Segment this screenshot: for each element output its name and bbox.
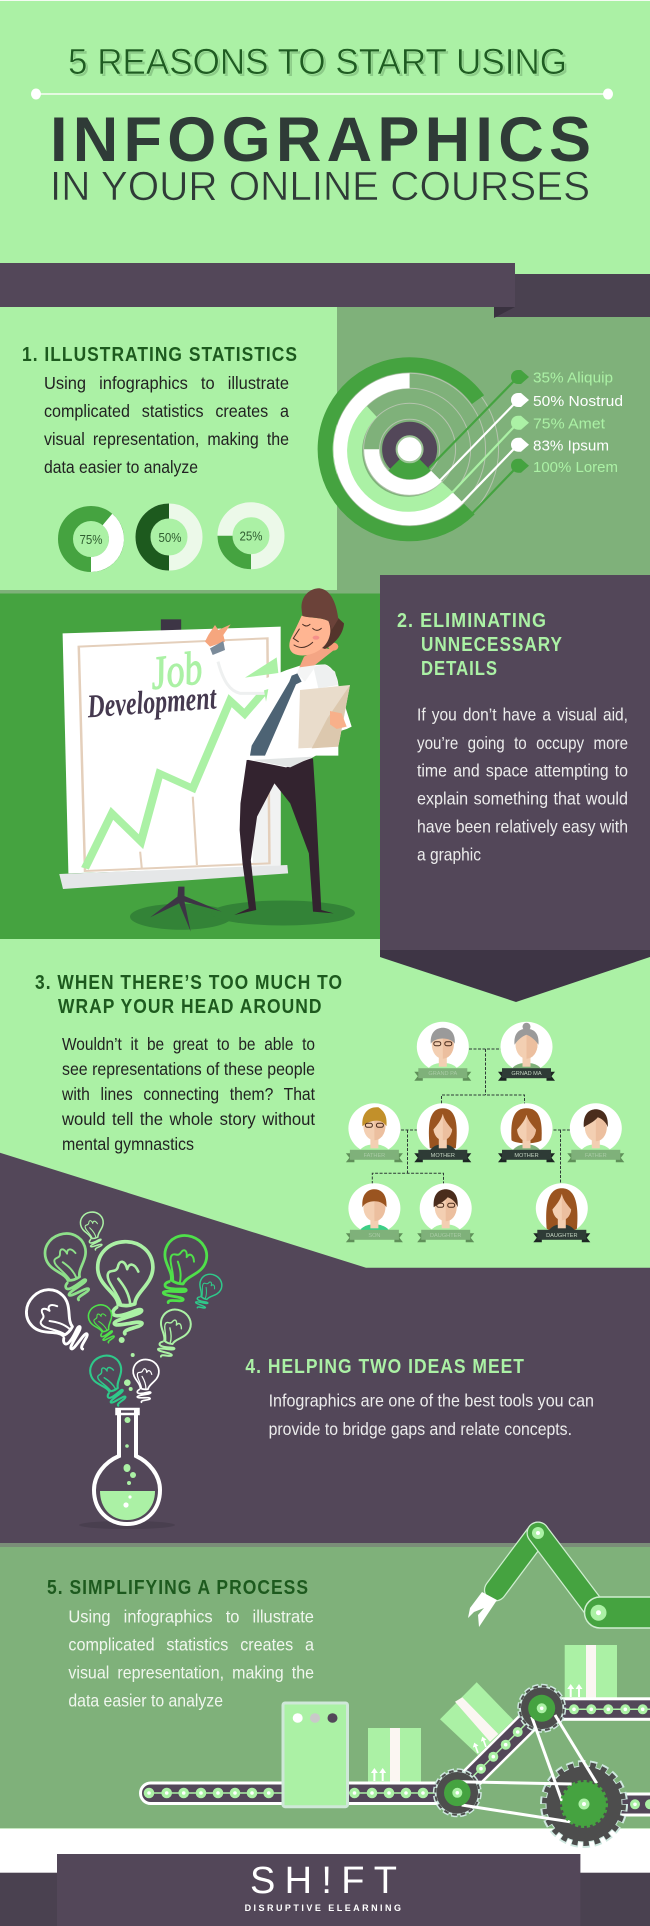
avatar: mother 2: MOTHER (514, 1153, 539, 1159)
title divider (31, 88, 613, 100)
legend pins (511, 370, 529, 473)
panel: section 2 illustration background (0, 590, 380, 939)
avatar: daughter 1 (417, 1183, 474, 1244)
hand on document (330, 711, 347, 729)
face (289, 616, 330, 655)
logo tagline: DISRUPTIVE ELEARNING (245, 1903, 401, 1913)
chart bars (140, 797, 197, 868)
panel: section 5 background (0, 1543, 650, 1873)
drive belts (460, 1715, 597, 1822)
title line: 5 reasons: 5 REASONS TO START USING (68, 41, 567, 82)
radial chart legend (429, 370, 623, 513)
panel: section 3 text (35, 971, 343, 1154)
legend connector lines (429, 377, 518, 513)
panel: section 4 dark background (0, 1153, 650, 1543)
donut chart 75%: 75% (80, 532, 103, 547)
box on upper belt (565, 1645, 617, 1698)
avatar: mother 1 (414, 1103, 471, 1164)
chart title: Development: Development (85, 680, 218, 725)
avatar: father 2: FATHER (585, 1153, 607, 1159)
body text 3: see representations of these people (62, 1059, 315, 1079)
body text 2: a graphic (417, 845, 481, 865)
tree connectors (372, 1049, 570, 1184)
legend labels (533, 371, 623, 476)
legend labels: 50% Nostrud (533, 394, 623, 410)
body text 5: complicated statistics creates a (68, 1635, 314, 1655)
necktie (250, 673, 302, 756)
title block (31, 41, 613, 209)
chart title: Job: Job (147, 642, 205, 700)
avatar: son (346, 1183, 403, 1244)
body text 4 (269, 1391, 594, 1439)
easel stand (150, 619, 222, 932)
facial features (293, 624, 321, 647)
gear bodies (434, 1685, 624, 1844)
heading 2: 2. ELIMINATING (397, 609, 547, 632)
avatar: father 1 (346, 1103, 403, 1164)
collar (297, 665, 317, 682)
upper belt (545, 1699, 650, 1719)
sorting machine (283, 1703, 348, 1807)
avatar: daughter 1: DAUGHTER (430, 1233, 461, 1239)
heading 5: 5. SIMPLIFYING A PROCESS (47, 1576, 309, 1599)
rising bubbles (119, 1337, 135, 1391)
body text 5 (68, 1607, 314, 1711)
panel: section 2 dark panel (380, 575, 650, 1002)
body text 2: If you don’t have a visual aid, (417, 705, 628, 725)
body text 3: mental gymnastics (62, 1134, 194, 1154)
gear body: upper small (519, 1685, 565, 1731)
heading 3: 3. WHEN THERE’S TOO MUCH TO (35, 971, 343, 994)
radial chart (321, 360, 499, 538)
heading 2: DETAILS (421, 657, 498, 680)
floor shadows (130, 900, 355, 930)
heading 3: WRAP YOUR HEAD AROUND (58, 995, 322, 1018)
logo: SH!FT: SH!FT (250, 1860, 397, 1902)
illustration: robot arm (468, 1527, 650, 1628)
document (298, 685, 350, 748)
avatar: son: SON (368, 1233, 380, 1239)
body text 4: provide to bridge gaps and relate concepts. (269, 1419, 572, 1439)
body text 2 (417, 705, 628, 865)
avatar: father 2 (567, 1103, 624, 1164)
avatar: daughter 2 (533, 1183, 590, 1244)
body text 5: visual representation, making the (68, 1663, 314, 1683)
tilted box (440, 1682, 513, 1755)
panel: section 1 text (22, 343, 298, 477)
body text 1: complicated statistics creates a (44, 401, 289, 421)
inclined belt (456, 1709, 541, 1793)
donut chart 75% (66, 514, 116, 564)
heading 4: 4. HELPING TWO IDEAS MEET (245, 1355, 525, 1378)
avatar: daughter 2: DAUGHTER (546, 1233, 577, 1239)
avatar: grand ma: GRNAD MA (511, 1071, 542, 1077)
trousers (234, 758, 334, 915)
body text 3 (61, 1034, 315, 1154)
body text 4: Infographics are one of the best tools you can (269, 1391, 594, 1411)
panel: section 4 text (245, 1355, 594, 1439)
body text 1: data easier to analyze (44, 457, 198, 477)
avatar: mother 1: MOTHER (431, 1153, 455, 1159)
panel: section 5 text (47, 1576, 314, 1711)
illustration: flask (79, 1409, 175, 1529)
donut chart 25%: 25% (240, 528, 263, 544)
donut chart 50% (143, 511, 195, 563)
body text 3: with lines connecting them? That (61, 1084, 315, 1104)
heading 2 (397, 609, 563, 680)
family tree (346, 1022, 624, 1244)
body text 5: data easier to analyze (68, 1691, 223, 1711)
shirt and raised arm (214, 650, 352, 756)
illustration: light bulbs (18, 1210, 225, 1411)
body text 3: Wouldn’t it be great to be able to (62, 1034, 315, 1054)
ear (328, 643, 338, 651)
easel board (63, 627, 281, 873)
illustration: presenter at easel (59, 588, 355, 932)
legend labels: 100% Lorem (533, 460, 618, 476)
gear body: lower small (434, 1770, 480, 1816)
gear hubs (444, 1695, 606, 1826)
arm highlight (245, 657, 278, 678)
avatar: grand ma (498, 1022, 555, 1083)
hair (302, 588, 338, 630)
footer (0, 1854, 650, 1926)
illustration: conveyor system (140, 1645, 650, 1844)
heading 1: 1. ILLUSTRATING STATISTICS (22, 343, 298, 366)
body text 2: time and space attempting to (417, 761, 628, 781)
body text 3: would tell the whole story without (61, 1109, 315, 1129)
heading 3 (35, 971, 343, 1018)
avatar: mother 2 (498, 1103, 555, 1164)
right belt (610, 1794, 650, 1815)
box on lower belt (368, 1728, 421, 1782)
body text 2: have been relatively easy with (417, 817, 628, 837)
legend labels: 83% Ipsum (533, 439, 609, 455)
gear body: large (544, 1764, 624, 1844)
body text 2: explain something that would (417, 789, 628, 809)
legend labels: 35% Aliquip (533, 371, 613, 387)
panel: statistics chart background (337, 300, 650, 594)
title line: in your online courses: IN YOUR ONLINE COURSES (50, 163, 590, 209)
avatar: father 1: FATHER (364, 1153, 385, 1159)
lower shirt (249, 743, 332, 767)
title line: infographics: INFOGRAPHICS (50, 105, 591, 175)
body text 5: Using infographics to illustrate (68, 1607, 314, 1627)
body text 1: Using infographics to illustrate (44, 373, 289, 393)
neck (299, 648, 334, 673)
rising chart line (85, 690, 265, 868)
donut chart 50%: 50% (158, 530, 182, 545)
lower belt (140, 1783, 452, 1804)
donut chart 25% (225, 510, 277, 562)
heading 2: UNNECESSARY (421, 633, 563, 656)
body text 1 (44, 373, 289, 477)
avatar: grand pa (414, 1022, 471, 1083)
easel tray (59, 865, 288, 889)
hair back (321, 617, 344, 649)
legend labels: 75% Amet (533, 417, 605, 433)
body text 1: visual representation, making the (44, 429, 289, 449)
ribbon banner (0, 263, 650, 318)
robot claw (468, 1592, 497, 1627)
title line: 5 reasons: 5 REASONS TO START USING (70, 43, 569, 84)
pointing hand (205, 624, 231, 647)
avatar: grand pa: GRAND PA (428, 1071, 457, 1077)
